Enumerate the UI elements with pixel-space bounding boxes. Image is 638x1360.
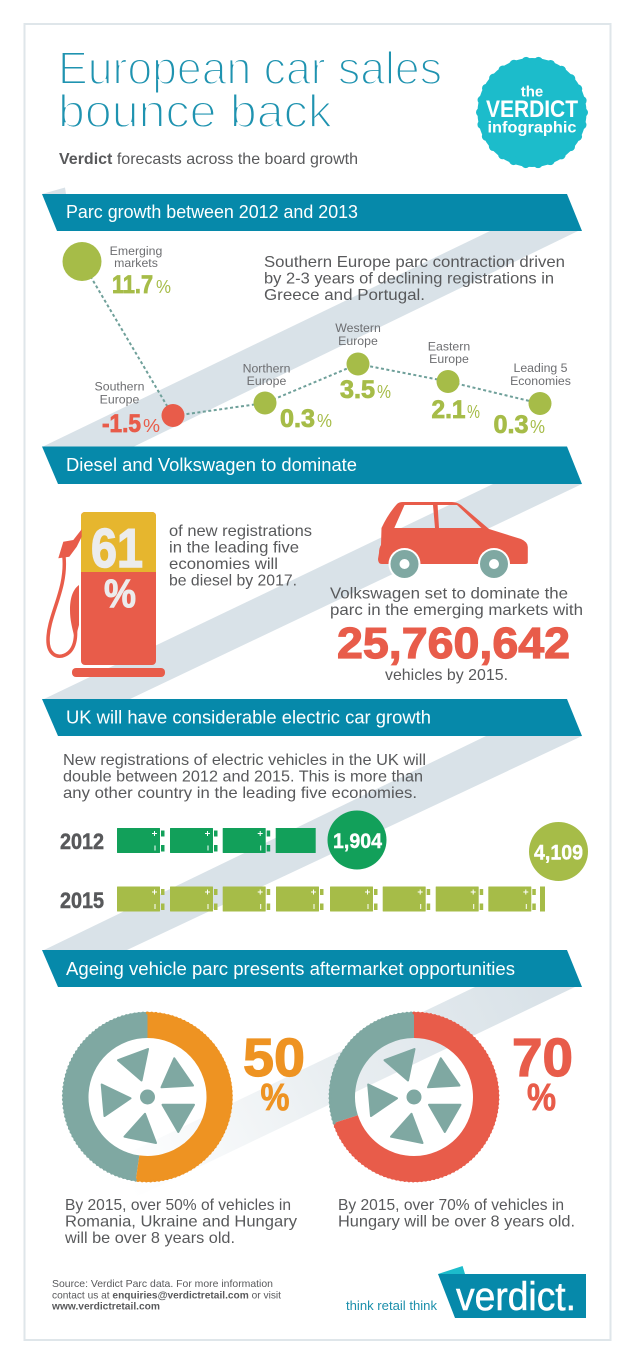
text: 70% caption	[338, 1197, 575, 1230]
dotted connector line	[82, 262, 540, 416]
data point: southern europe: Europe	[100, 392, 139, 406]
data point: emerging markets: markets	[114, 256, 158, 270]
data point: leading 5 economies: 0.3	[494, 411, 528, 439]
figure: 25,760,642: 25,760,642	[337, 619, 570, 668]
figure: 70%	[512, 1028, 573, 1119]
badge: the Verdict infographic: the	[521, 84, 543, 100]
data point: emerging markets: Emerging	[110, 244, 162, 258]
data point: eastern europe: Eastern	[428, 340, 470, 354]
text: 50% caption: By 2015, over 50% of vehicles in	[65, 1197, 291, 1214]
figure: 50%: %	[260, 1077, 290, 1119]
text: volkswagen dominance: vehicles by 2015.	[385, 667, 508, 684]
value circle: 1,904	[328, 810, 386, 870]
chart: 2015 batteries: 2015	[60, 888, 104, 913]
data point: northern europe: Northern	[243, 362, 291, 376]
subtitle: Verdict forecasts across the board growth	[59, 151, 358, 168]
data point: western europe	[335, 321, 391, 404]
data point: northern europe: Europe	[247, 374, 286, 388]
title: bounce back	[58, 85, 333, 137]
text: uk electric registrations: any other country in the leading five economies.	[63, 785, 417, 802]
data point: northern europe: 0.3	[280, 405, 315, 433]
heading: ageing vehicle parc: Ageing vehicle parc presents aftermarket opportunities	[66, 959, 515, 979]
title: European car sales	[58, 42, 442, 94]
value circle: 4,109: 4,109	[534, 842, 583, 864]
text: 50% caption: Romania, Ukraine and Hungary	[65, 1214, 297, 1230]
heading: diesel and volkswagen	[42, 446, 582, 484]
text: volkswagen dominance	[330, 586, 583, 684]
data point: leading 5 economies: %	[530, 417, 545, 437]
badge: the Verdict infographic	[478, 58, 586, 167]
value circle: 4,109	[529, 822, 588, 881]
figure: 50%: 50	[243, 1028, 305, 1088]
data point: northern europe: %	[317, 411, 332, 431]
source note: contact us at enquiries@verdictretail.com or visit	[52, 1290, 281, 1302]
chart: 2015 batteries	[60, 822, 588, 913]
data point: southern europe	[95, 380, 184, 438]
text: diesel registrations	[169, 523, 312, 590]
figure: 70%: %	[527, 1077, 556, 1119]
source note	[51, 1278, 281, 1312]
data point: leading 5 economies: Leading 5	[513, 361, 568, 375]
data point: southern europe: -1.5	[102, 410, 141, 438]
heading: ageing vehicle parc	[42, 950, 582, 987]
text: uk electric registrations: double between 2012 and 2015. This is more than	[63, 768, 423, 786]
text: volkswagen dominance: Volkswagen set to dominate the	[330, 586, 568, 602]
badge: the Verdict infographic: infographic	[488, 120, 577, 136]
chart: 2012 batteries	[60, 810, 386, 870]
source note: www.verdictretail.com	[51, 1300, 160, 1312]
text: uk electric registrations: New registrations of electric vehicles in the UK will	[63, 752, 426, 769]
source note: Source: Verdict Parc data. For more information	[52, 1278, 273, 1290]
data point: western europe: Europe	[338, 334, 378, 348]
text: 70% caption: Hungary will be over 8 years old.	[338, 1214, 575, 1230]
panel: parc growth chart	[62, 242, 571, 439]
icon: fuel pump 61%: 61	[91, 517, 143, 579]
data point: eastern europe: Europe	[429, 352, 469, 366]
heading: uk electric growth: UK will have considerable electric car growth	[66, 708, 431, 728]
icon: car	[378, 502, 528, 580]
data point: western europe: 3.5	[340, 376, 375, 404]
text: 70% caption: By 2015, over 70% of vehicles in	[338, 1197, 564, 1214]
text: diesel registrations: in the leading five	[169, 540, 299, 556]
data point: emerging markets	[62, 242, 171, 299]
logo: verdict: verdict.	[456, 1275, 576, 1319]
text: southern europe note	[264, 254, 565, 304]
text: southern europe note: by 2-3 years of declining registrations in	[264, 270, 554, 288]
data point: emerging markets: 11.7	[112, 271, 153, 299]
heading: diesel and volkswagen: Diesel and Volkswagen to dominate	[66, 455, 357, 475]
text: 50% caption: will be over 8 years old.	[64, 1230, 235, 1247]
data point: northern europe	[243, 362, 332, 433]
chart: 2012 batteries: 2012	[60, 829, 104, 854]
text: volkswagen dominance: parc in the emerging markets with	[330, 602, 583, 619]
value circle: 1,904: 1,904	[333, 830, 382, 853]
icon: fuel pump 61%	[48, 512, 165, 677]
data point: eastern europe: 2.1	[432, 396, 466, 424]
data point: southern europe: %	[143, 416, 160, 436]
text: diesel registrations: be diesel by 2017.	[169, 572, 297, 590]
figure: 70%: 70	[512, 1028, 573, 1088]
figure: 50%	[243, 1028, 305, 1119]
tagline: think retail think	[346, 1298, 437, 1313]
heading: parc growth: Parc growth between 2012 and 2013	[66, 202, 358, 222]
data point: southern europe: Southern	[95, 380, 145, 394]
icon: fuel pump 61%: %	[104, 572, 136, 616]
icon: tyre 50%	[63, 1013, 231, 1181]
data point: western europe: %	[377, 382, 391, 402]
heading: uk electric growth	[42, 699, 582, 736]
text: diesel registrations: of new registrations	[169, 523, 312, 540]
heading: parc growth	[42, 188, 582, 231]
data point: leading 5 economies: Economies	[510, 374, 571, 388]
title	[58, 42, 442, 137]
data point: emerging markets: %	[156, 277, 171, 297]
data point: western europe: Western	[335, 321, 381, 335]
icon: tyre 70%	[330, 1013, 498, 1181]
data point: leading 5 economies	[494, 361, 571, 439]
text: southern europe note: Southern Europe parc contraction driven	[264, 254, 565, 271]
text: southern europe note: Greece and Portugal.	[264, 287, 425, 304]
text: 50% caption	[64, 1197, 297, 1247]
text: uk electric registrations	[63, 752, 426, 802]
text: diesel registrations: economies will	[169, 556, 278, 573]
data point: eastern europe	[428, 340, 480, 424]
badge: the Verdict infographic: VERDICT	[486, 96, 578, 123]
data point: eastern europe: %	[467, 402, 480, 422]
